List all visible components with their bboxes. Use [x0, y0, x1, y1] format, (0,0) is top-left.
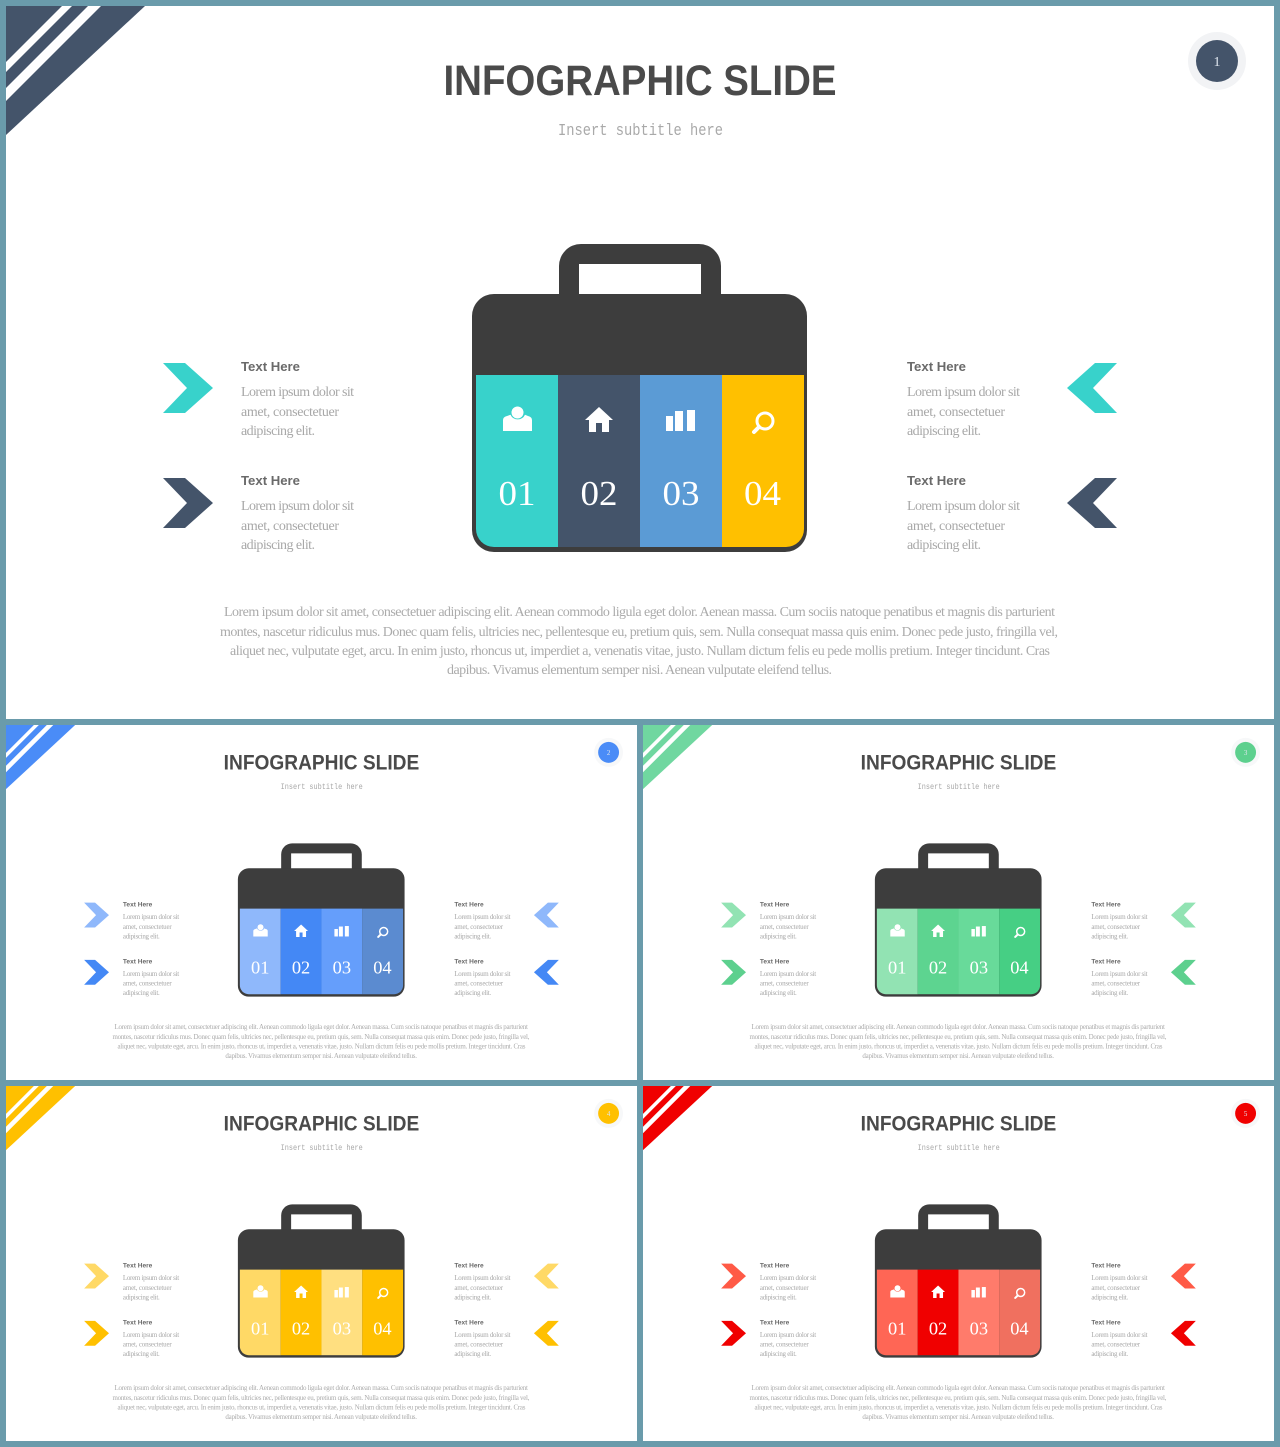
icon: person: [503, 406, 532, 431]
body paragraph: Lorem ipsum dolor sit amet, consectetuer adipiscing elit. Aenean commodo ligula eget dolor. Aenean massa. Cum sociis natoque penatibus et magnis dis parturient: [114, 1384, 528, 1392]
arrow: left bottom: [84, 960, 109, 985]
text block: left top: [123, 902, 179, 940]
numbers: 01: [251, 1318, 269, 1338]
text block: right top: adipiscing elit.: [1091, 1293, 1128, 1301]
icon: magnifier: [754, 413, 773, 432]
text block: right bottom: amet, consectetuer: [1091, 1341, 1141, 1349]
text block: right bottom: Lorem ipsum dolor sit: [907, 499, 1020, 514]
numbers: 01: [251, 957, 269, 977]
body paragraph: dapibus. Vivamus elementum semper nisi. Aenean vulputate eleifend tellus.: [225, 1413, 417, 1421]
numbers: [251, 957, 392, 977]
text block: left bottom: Text Here: [241, 473, 300, 488]
arrow: right bottom: [1171, 960, 1196, 985]
text block: left bottom: amet, consectetuer: [123, 980, 172, 988]
icon: magnifier: [1015, 1289, 1025, 1298]
text block: left bottom: Text Here: [760, 958, 790, 965]
text block: left top: Text Here: [241, 359, 300, 374]
body paragraph: Lorem ipsum dolor sit amet, consectetuer adipiscing elit. Aenean commodo ligula eget dolor. Aenean massa. Cum sociis natoque penatibus et magnis dis parturient: [751, 1384, 1165, 1392]
icon: house: [585, 407, 613, 432]
arrow: right bottom: [1067, 478, 1117, 528]
text block: right bottom: adipiscing elit.: [1091, 1350, 1128, 1358]
text block: left top: amet, consectetuer: [760, 1284, 809, 1292]
text block: left bottom: adipiscing elit.: [760, 989, 797, 997]
corner ribbon: [6, 1086, 75, 1150]
numbers: 03: [333, 1318, 351, 1338]
numbers: 04: [373, 957, 392, 977]
text block: right bottom: Text Here: [1091, 958, 1121, 965]
text block: right top: Text Here: [1091, 902, 1121, 909]
text block: right top: Lorem ipsum dolor sit: [454, 1274, 511, 1282]
numbers: 01: [888, 957, 906, 977]
body paragraph: aliquet nec, vulputate eget, arcu. In enim justo, rhoncus ut, imperdiet a, venenatis vitae, justo. Nullam dictum felis eu pede mollis pretium. Integer tincidunt. Cras: [754, 1403, 1163, 1411]
text block: left top: Lorem ipsum dolor sit: [760, 1274, 816, 1282]
icon: house: [931, 1286, 945, 1298]
numbers: 01: [888, 1318, 906, 1338]
text block: left bottom: Lorem ipsum dolor sit: [760, 1331, 816, 1339]
numbers: 04: [373, 1318, 392, 1338]
numbers: [251, 1318, 392, 1338]
text block: left bottom: adipiscing elit.: [123, 1350, 160, 1358]
page badge: [594, 1099, 623, 1128]
text block: left bottom: amet, consectetuer: [123, 1341, 172, 1349]
panel: main slide (navy): [6, 6, 1274, 719]
page badge: [594, 738, 623, 767]
arrow: right bottom: [1171, 1321, 1196, 1346]
page badge: 4: [607, 1110, 611, 1118]
arrow: left top: [163, 363, 213, 413]
body paragraph: [220, 605, 1058, 678]
corner ribbon: [643, 1086, 712, 1150]
text block: left top: [760, 1263, 816, 1301]
text block: right top: Text Here: [1091, 1263, 1121, 1270]
text block: left bottom: Text Here: [123, 1319, 153, 1326]
body paragraph: aliquet nec, vulputate eget, arcu. In enim justo, rhoncus ut, imperdiet a, venenatis vitae, justo. Nullam dictum felis eu pede mollis pretium. Integer tincidunt. Cras: [230, 644, 1050, 659]
text block: right bottom: [907, 473, 1020, 553]
text block: right bottom: adipiscing elit.: [454, 1350, 491, 1358]
subtitle: Insert subtitle here: [918, 782, 1000, 792]
numbers: 01: [498, 474, 536, 513]
text block: right top: Lorem ipsum dolor sit: [907, 385, 1020, 400]
title: INFOGRAPHIC SLIDE: [861, 750, 1056, 774]
numbers: 03: [970, 1318, 988, 1338]
text block: left bottom: amet, consectetuer: [760, 1341, 809, 1349]
text block: left bottom: adipiscing elit.: [123, 989, 160, 997]
text block: right top: amet, consectetuer: [907, 405, 1005, 420]
briefcase: [472, 244, 807, 552]
briefcase: [875, 1204, 1042, 1358]
body paragraph: montes, nascetur ridiculus mus. Donec quam felis, ultricies nec, pellentesque eu, pretium quis, sem. Nulla consequat massa quis enim. Donec pede justo, fringilla vel,: [112, 1033, 530, 1041]
icon: bars: [971, 1287, 986, 1297]
body paragraph: [112, 1384, 530, 1421]
icon: magnifier: [378, 1289, 388, 1298]
body paragraph: montes, nascetur ridiculus mus. Donec quam felis, ultricies nec, pellentesque eu, pretium quis, sem. Nulla consequat massa quis enim. Donec pede justo, fringilla vel,: [220, 625, 1058, 640]
text block: left bottom: amet, consectetuer: [241, 519, 339, 534]
text block: left top: adipiscing elit.: [241, 424, 315, 439]
arrow: left top: [84, 903, 109, 928]
page badge: [1231, 738, 1260, 767]
text block: right top: amet, consectetuer: [454, 923, 504, 931]
text block: right bottom: [1091, 958, 1148, 997]
body paragraph: aliquet nec, vulputate eget, arcu. In enim justo, rhoncus ut, imperdiet a, venenatis vitae, justo. Nullam dictum felis eu pede mollis pretium. Integer tincidunt. Cras: [754, 1042, 1163, 1050]
body paragraph: [749, 1384, 1167, 1421]
text block: left bottom: Lorem ipsum dolor sit: [760, 970, 816, 978]
text block: left bottom: [760, 958, 816, 997]
body paragraph: [112, 1023, 530, 1060]
text block: left bottom: Lorem ipsum dolor sit: [123, 970, 179, 978]
panel: red slide: [643, 1086, 1274, 1441]
numbers: 03: [970, 957, 988, 977]
panel: yellow slide: [6, 1086, 637, 1441]
numbers: 04: [1010, 1318, 1029, 1338]
text block: right top: adipiscing elit.: [454, 1293, 491, 1301]
subtitle: Insert subtitle here: [918, 1143, 1000, 1153]
text block: right top: [1091, 902, 1148, 940]
icon: house: [294, 1286, 308, 1298]
numbers: [498, 474, 781, 513]
text block: left top: [760, 902, 816, 940]
text block: right bottom: adipiscing elit.: [454, 989, 491, 997]
text block: left top: adipiscing elit.: [760, 1293, 797, 1301]
icon: house: [931, 925, 945, 937]
text block: right bottom: [454, 958, 511, 997]
arrow: left top: [721, 903, 746, 928]
text block: right bottom: Lorem ipsum dolor sit: [454, 970, 511, 978]
text block: right top: [907, 359, 1020, 439]
text block: left top: Text Here: [123, 1263, 153, 1270]
arrow: right bottom: [534, 1321, 559, 1346]
numbers: 02: [580, 474, 618, 513]
body paragraph: montes, nascetur ridiculus mus. Donec quam felis, ultricies nec, pellentesque eu, pretium quis, sem. Nulla consequat massa quis enim. Donec pede justo, fringilla vel,: [749, 1394, 1167, 1402]
corner ribbon: [643, 725, 712, 789]
body paragraph: montes, nascetur ridiculus mus. Donec quam felis, ultricies nec, pellentesque eu, pretium quis, sem. Nulla consequat massa quis enim. Donec pede justo, fringilla vel,: [112, 1394, 530, 1402]
text block: right bottom: [1091, 1319, 1148, 1358]
text block: left top: Lorem ipsum dolor sit: [123, 1274, 179, 1282]
body paragraph: dapibus. Vivamus elementum semper nisi. Aenean vulputate eleifend tellus.: [862, 1052, 1054, 1060]
panel: green slide: [643, 725, 1274, 1080]
text block: right bottom: amet, consectetuer: [1091, 980, 1141, 988]
text block: left top: adipiscing elit.: [123, 1293, 160, 1301]
text block: left top: amet, consectetuer: [241, 405, 339, 420]
arrow: right top: [534, 903, 559, 928]
numbers: 04: [1010, 957, 1029, 977]
arrow: right top: [1067, 363, 1117, 413]
text block: right top: Lorem ipsum dolor sit: [1091, 913, 1148, 921]
icon: bars: [334, 926, 349, 936]
briefcase: [875, 843, 1042, 997]
text block: left bottom: Lorem ipsum dolor sit: [241, 499, 354, 514]
text block: left bottom: Text Here: [123, 958, 153, 965]
arrow: left bottom: [721, 1321, 746, 1346]
arrow: right top: [1171, 1264, 1196, 1289]
numbers: 03: [662, 474, 700, 513]
text block: right bottom: Text Here: [907, 473, 966, 488]
text block: left bottom: amet, consectetuer: [760, 980, 809, 988]
text block: right top: Text Here: [907, 359, 966, 374]
text block: right bottom: Lorem ipsum dolor sit: [454, 1331, 511, 1339]
text block: right top: amet, consectetuer: [1091, 1284, 1141, 1292]
text block: left bottom: Lorem ipsum dolor sit: [123, 1331, 179, 1339]
text block: left top: Text Here: [760, 902, 790, 909]
icon: bars: [334, 1287, 349, 1297]
body paragraph: aliquet nec, vulputate eget, arcu. In enim justo, rhoncus ut, imperdiet a, venenatis vitae, justo. Nullam dictum felis eu pede mollis pretium. Integer tincidunt. Cras: [117, 1042, 526, 1050]
subtitle: Insert subtitle here: [281, 782, 363, 792]
body paragraph: montes, nascetur ridiculus mus. Donec quam felis, ultricies nec, pellentesque eu, pretium quis, sem. Nulla consequat massa quis enim. Donec pede justo, fringilla vel,: [749, 1033, 1167, 1041]
text block: left bottom: adipiscing elit.: [241, 538, 315, 553]
text block: right bottom: Lorem ipsum dolor sit: [1091, 1331, 1148, 1339]
text block: left top: adipiscing elit.: [123, 932, 160, 940]
briefcase: [238, 843, 405, 997]
numbers: 03: [333, 957, 351, 977]
numbers: [888, 1318, 1029, 1338]
body paragraph: Lorem ipsum dolor sit amet, consectetuer adipiscing elit. Aenean commodo ligula eget dolor. Aenean massa. Cum sociis natoque penatibus et magnis dis parturient: [114, 1023, 528, 1031]
body paragraph: dapibus. Vivamus elementum semper nisi. Aenean vulputate eleifend tellus.: [447, 663, 832, 678]
numbers: [888, 957, 1029, 977]
text block: right top: adipiscing elit.: [1091, 932, 1128, 940]
title: INFOGRAPHIC SLIDE: [444, 57, 836, 105]
numbers: 04: [744, 474, 781, 513]
text block: right bottom: Text Here: [454, 1319, 484, 1326]
text block: right bottom: adipiscing elit.: [1091, 989, 1128, 997]
body paragraph: dapibus. Vivamus elementum semper nisi. Aenean vulputate eleifend tellus.: [862, 1413, 1054, 1421]
body paragraph: [749, 1023, 1167, 1060]
icon: person: [890, 924, 905, 936]
text block: right bottom: amet, consectetuer: [454, 1341, 504, 1349]
text block: left top: amet, consectetuer: [123, 923, 172, 931]
text block: right top: Lorem ipsum dolor sit: [454, 913, 511, 921]
icon: person: [890, 1285, 905, 1297]
arrow: right top: [534, 1264, 559, 1289]
text block: right top: [454, 902, 511, 940]
text block: right bottom: adipiscing elit.: [907, 538, 981, 553]
text block: right bottom: amet, consectetuer: [907, 519, 1005, 534]
text block: left top: Lorem ipsum dolor sit: [241, 385, 354, 400]
arrow: left bottom: [163, 478, 213, 528]
corner ribbon: [6, 6, 145, 135]
text block: right top: amet, consectetuer: [1091, 923, 1141, 931]
subtitle: Insert subtitle here: [558, 122, 723, 141]
text block: left top: Text Here: [760, 1263, 790, 1270]
page badge: [1188, 32, 1246, 90]
text block: left bottom: [123, 1319, 179, 1358]
subtitle: Insert subtitle here: [281, 1143, 363, 1153]
title: INFOGRAPHIC SLIDE: [861, 1111, 1056, 1135]
text block: left top: [241, 359, 354, 439]
numbers: 02: [292, 1318, 310, 1338]
arrow: left bottom: [721, 960, 746, 985]
text block: right bottom: amet, consectetuer: [454, 980, 504, 988]
icon: magnifier: [378, 928, 388, 937]
text block: left bottom: [760, 1319, 816, 1358]
arrow: left top: [721, 1264, 746, 1289]
numbers: 02: [929, 1318, 947, 1338]
text block: right top: Text Here: [454, 1263, 484, 1270]
text block: left bottom: adipiscing elit.: [760, 1350, 797, 1358]
text block: left top: Lorem ipsum dolor sit: [760, 913, 816, 921]
icon: person: [253, 1285, 268, 1297]
briefcase: [238, 1204, 405, 1358]
body paragraph: Lorem ipsum dolor sit amet, consectetuer adipiscing elit. Aenean commodo ligula eget dolor. Aenean massa. Cum sociis natoque penatibus et magnis dis parturient: [224, 605, 1055, 620]
page badge: [1231, 1099, 1260, 1128]
page badge: 5: [1244, 1110, 1248, 1118]
title: INFOGRAPHIC SLIDE: [224, 1111, 419, 1135]
numbers: 02: [929, 957, 947, 977]
arrow: left top: [84, 1264, 109, 1289]
text block: right top: [1091, 1263, 1148, 1301]
text block: right top: adipiscing elit.: [454, 932, 491, 940]
title: INFOGRAPHIC SLIDE: [224, 750, 419, 774]
text block: left bottom: [123, 958, 179, 997]
body paragraph: Lorem ipsum dolor sit amet, consectetuer adipiscing elit. Aenean commodo ligula eget dolor. Aenean massa. Cum sociis natoque penatibus et magnis dis parturient: [751, 1023, 1165, 1031]
arrow: right bottom: [534, 960, 559, 985]
icon: person: [253, 924, 268, 936]
text block: left top: amet, consectetuer: [123, 1284, 172, 1292]
text block: left top: amet, consectetuer: [760, 923, 809, 931]
text block: right top: Text Here: [454, 902, 484, 909]
text block: left top: adipiscing elit.: [760, 932, 797, 940]
panel: blue slide: [6, 725, 637, 1080]
arrow: right top: [1171, 903, 1196, 928]
arrow: left bottom: [84, 1321, 109, 1346]
page badge: 3: [1244, 749, 1248, 757]
text block: right bottom: Text Here: [454, 958, 484, 965]
text block: right top: adipiscing elit.: [907, 424, 981, 439]
text block: left top: Text Here: [123, 902, 153, 909]
icon: magnifier: [1015, 928, 1025, 937]
text block: left top: Lorem ipsum dolor sit: [123, 913, 179, 921]
text block: right bottom: Text Here: [1091, 1319, 1121, 1326]
page badge: 2: [607, 749, 611, 757]
corner ribbon: [6, 725, 75, 789]
text block: left bottom: [241, 473, 354, 553]
body paragraph: aliquet nec, vulputate eget, arcu. In enim justo, rhoncus ut, imperdiet a, venenatis vitae, justo. Nullam dictum felis eu pede mollis pretium. Integer tincidunt. Cras: [117, 1403, 526, 1411]
text block: right bottom: [454, 1319, 511, 1358]
icon: house: [294, 925, 308, 937]
text block: left bottom: Text Here: [760, 1319, 790, 1326]
body paragraph: dapibus. Vivamus elementum semper nisi. Aenean vulputate eleifend tellus.: [225, 1052, 417, 1060]
numbers: 02: [292, 957, 310, 977]
page badge: 1: [1214, 55, 1220, 70]
text block: right top: [454, 1263, 511, 1301]
icon: bars: [971, 926, 986, 936]
text block: right top: amet, consectetuer: [454, 1284, 504, 1292]
text block: left top: [123, 1263, 179, 1301]
icon: bars: [666, 410, 695, 431]
text block: right top: Lorem ipsum dolor sit: [1091, 1274, 1148, 1282]
text block: right bottom: Lorem ipsum dolor sit: [1091, 970, 1148, 978]
